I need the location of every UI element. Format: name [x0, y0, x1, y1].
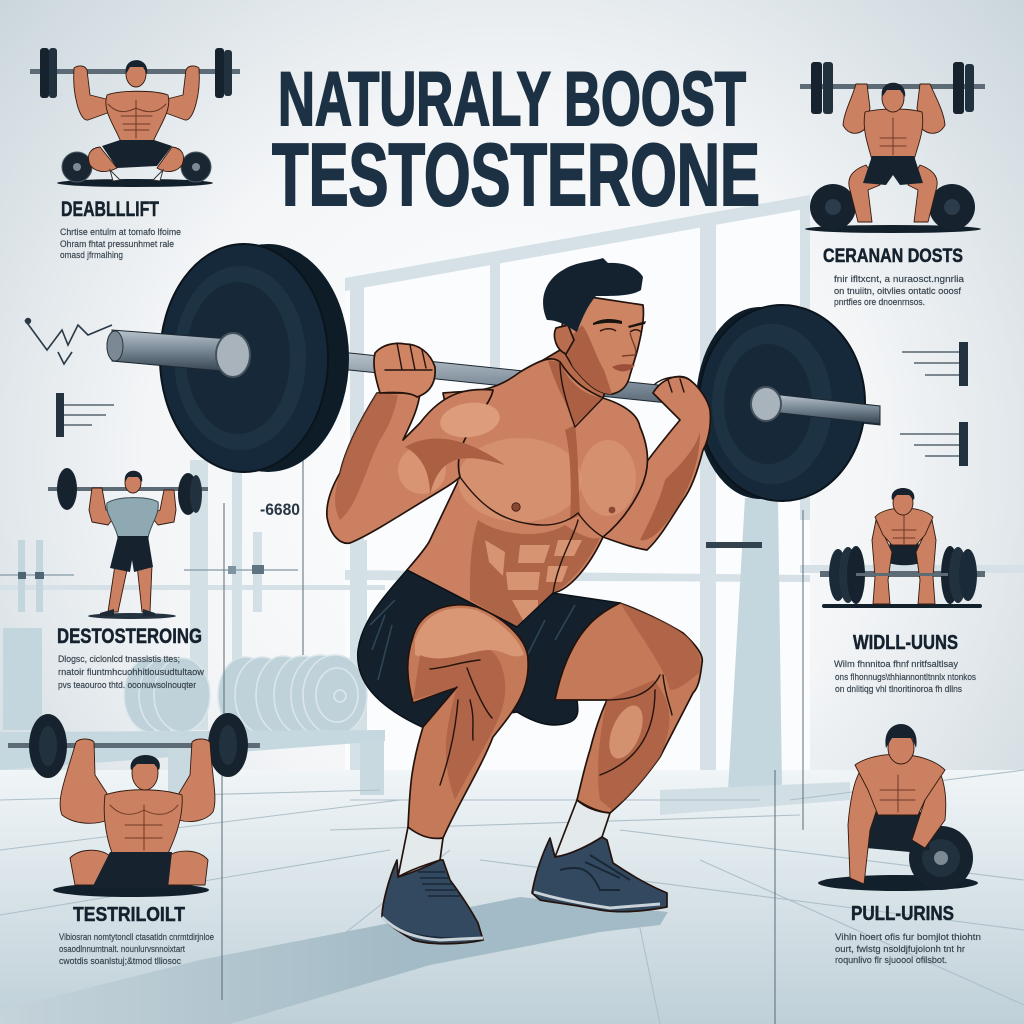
right leg shading — [598, 603, 701, 810]
face details — [593, 319, 646, 371]
figure — [60, 739, 215, 888]
text block: ceranan dosts: pnrtfies ore dnoenrnsos. — [834, 297, 925, 308]
right tick icon upper — [902, 342, 968, 386]
left leg shading — [413, 608, 524, 800]
main barbell: bar — [107, 331, 880, 425]
neck — [493, 350, 610, 398]
main barbell: right plate — [696, 305, 880, 501]
text block: deadlift: omasd jfrmalhing — [60, 250, 123, 261]
weight plate stack — [124, 655, 367, 735]
right shoe details — [560, 855, 630, 890]
barbell — [30, 48, 240, 98]
heading: destosteroing: DESTOSTEROING — [57, 625, 202, 648]
text block: destosteroing: rnatoir fiuntmhcuohhitlousudtultaow — [58, 667, 204, 678]
ear — [554, 325, 574, 354]
figure — [856, 488, 948, 604]
heading: pull-urins: PULL-URINS — [851, 903, 954, 925]
text block: testriloilt: cwotdis soanlstuj;&tmod tlliosoc — [59, 956, 181, 967]
left shoe — [382, 860, 483, 944]
text block: pull-urins: ourt, fwlstg nsoldjfujolonh tnt hr — [835, 944, 966, 955]
exercise panel: bottom left — [8, 713, 260, 897]
text block: ceranan dosts: fnir ifltxcnt, a nuraosct.ngnrlia — [834, 274, 965, 285]
figure — [843, 83, 945, 222]
shorts highlights — [370, 600, 575, 680]
floor shadow — [53, 883, 209, 897]
left hand fingers — [385, 343, 432, 370]
floor plates — [810, 184, 975, 230]
text block: widll-uuns: Wilm fhnnitoa fhnf nritfsaltlsay — [834, 659, 958, 670]
main athlete — [327, 258, 710, 944]
small number label: -6680 — [260, 500, 300, 519]
right leg — [555, 603, 702, 813]
figure — [74, 60, 199, 181]
left tick icon — [56, 393, 114, 437]
right shoe — [532, 837, 667, 912]
left shoe details — [385, 872, 478, 938]
right hand fingers — [655, 377, 692, 392]
barbell — [48, 468, 208, 515]
text block: destosteroing: pvs teaouroo thtd. ooonuwsolnouqter — [58, 680, 197, 691]
text block: pull-urins: Vihln hoert ofis fur bomjlot thiohtn — [835, 932, 981, 943]
exercise panel: left middle — [48, 468, 208, 619]
right tick icon lower — [900, 422, 968, 466]
left leg — [408, 605, 528, 838]
floor shadow — [88, 613, 176, 619]
title: NATURALY BOOST — [278, 57, 746, 142]
text block: deadlift: Ohram fhtat pressunhmet rale — [60, 239, 174, 250]
head — [560, 297, 643, 394]
title: TESTOSTERONE — [272, 125, 760, 224]
right shoe sole — [534, 892, 660, 908]
heading: ceranan dosts: CERANAN DOSTS — [823, 246, 963, 267]
left arm shading — [335, 393, 505, 520]
text block: ceranan dosts: on tnuiitn, oitvlies ontatlc ooosf — [834, 286, 961, 297]
text block: testriloilt: osaodlnnumtnalt. nounlurvsnnoixtart — [59, 944, 185, 955]
left hand — [374, 343, 435, 397]
left sock — [398, 827, 443, 877]
text block: pull-urins — [835, 932, 981, 966]
floor shadow — [818, 875, 978, 891]
heading: deadlift: DEABLLLIFT — [61, 198, 159, 221]
barbell — [800, 62, 985, 114]
text block: widll-uuns: on dnlitiqg vhl tlnoritinoroa fh dllns — [835, 684, 962, 695]
heading: testriloilt: TESTRILOILT — [73, 904, 185, 926]
shorts — [358, 570, 620, 727]
floor shadow — [805, 225, 981, 233]
text block: deadlift — [60, 227, 181, 261]
heading: widll-uuns: WIDLL-UUNS — [853, 632, 958, 654]
main barbell: left plate — [107, 244, 349, 472]
athlete torso — [407, 359, 648, 627]
text block: deadlift: Chrtise entulm at tomafo lfoime — [60, 227, 181, 238]
text block: widll-uuns: ons flhonnugs\thhiannontltnnlx ntonkos — [835, 672, 976, 683]
left arm — [327, 389, 493, 543]
exercise panel: top right — [800, 62, 985, 233]
barbell — [8, 713, 260, 778]
text block: destosteroing — [58, 654, 204, 691]
text block: testriloilt: Vibiosran nomtytoncll ctasatidn cnrmtdirjnloe — [59, 932, 214, 943]
right arm shading — [640, 432, 700, 540]
text block: widll-uuns — [834, 659, 976, 695]
text block: testriloilt — [59, 932, 214, 967]
left chart squiggle icon — [25, 319, 112, 364]
torso shading — [458, 360, 636, 627]
hair — [543, 258, 643, 332]
floor shadow — [57, 179, 213, 187]
text block: pull-urins: roqunlivo flr sjuoool ofilsbot. — [835, 955, 947, 966]
text block: ceranan dosts — [834, 274, 965, 308]
text block: destosteroing: Dlogsc, ciclonlcd tnasslstis ttes; — [58, 654, 180, 665]
exercise panel: right middle — [820, 488, 985, 608]
title — [272, 57, 760, 224]
floor shadow — [822, 604, 982, 608]
figure — [848, 724, 946, 884]
right arm — [603, 376, 710, 550]
figure — [89, 471, 176, 616]
exercise panel: bottom right — [818, 724, 978, 891]
barbell plates — [820, 546, 985, 604]
floor plate — [909, 826, 973, 890]
face shading — [563, 325, 612, 394]
floor plates — [62, 152, 211, 182]
exercise panel: top left — [30, 48, 240, 187]
right sock — [555, 800, 610, 857]
left shoe sole — [382, 917, 483, 940]
